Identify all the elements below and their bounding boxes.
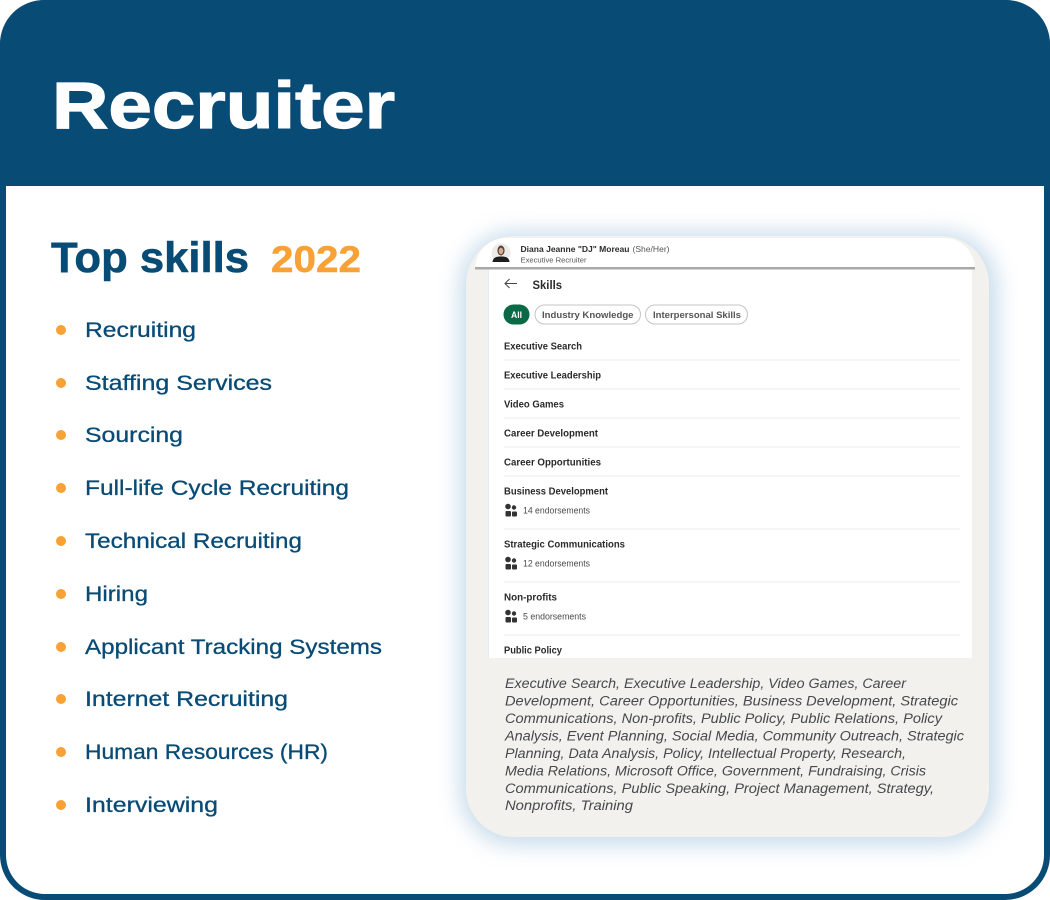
filter pills [504, 304, 748, 324]
endorsements: 5 endorsements [523, 612, 587, 622]
full skills paragraph: Executive Search, Executive Leadership, Video Games, Career [505, 676, 907, 691]
skills list [56, 319, 382, 817]
icon: people [505, 504, 517, 516]
avatar [492, 244, 510, 262]
full skills paragraph: Analysis, Event Planning, Social Media, Community Outreach, Strategic [504, 728, 964, 744]
skills heading: Skills [532, 280, 562, 292]
skills list: Internet Recruiting [85, 688, 288, 711]
panel shadow [460, 232, 997, 845]
profile bar: Diana Jeanne "DJ" Moreau [520, 244, 630, 254]
screenshot [475, 238, 975, 658]
skills list: Sourcing [85, 424, 183, 447]
heading: top skills 2022: 2022 [271, 239, 361, 280]
icon: people [505, 610, 517, 622]
full skills paragraph: Development, Career Opportunities, Business Development, Strategic [505, 694, 958, 708]
full skills paragraph: Nonprofits, Training [505, 798, 634, 813]
full skills paragraph: Planning, Data Analysis, Policy, Intellectual Property, Research, [505, 746, 906, 761]
skills list: Interviewing [85, 794, 218, 817]
profile bar: (She/Her) [632, 244, 670, 254]
profile bar: Executive Recruiter [520, 256, 587, 264]
skill rows [504, 342, 960, 656]
skills list: Recruiting [85, 319, 196, 342]
panel: linkedin skills [466, 236, 989, 837]
skill rows: Business Development [504, 486, 609, 498]
endorsements [505, 504, 591, 622]
skills list: Staffing Services [85, 372, 272, 395]
skill rows: Executive Leadership [504, 370, 601, 382]
heading: top skills 2022 [51, 234, 361, 282]
full skills paragraph: Communications, Public Speaking, Project Management, Strategy, [505, 781, 934, 796]
filter pills: Industry Knowledge [542, 310, 634, 320]
full skills paragraph: Media Relations, Microsoft Office, Government, Fundraising, Crisis [505, 764, 926, 778]
skills list: Hiring [85, 583, 148, 606]
skill rows: Career Opportunities [504, 458, 602, 468]
filter pills: Interpersonal Skills [653, 310, 741, 320]
header band [0, 0, 1050, 186]
skill rows: Non-profits [504, 592, 558, 604]
endorsements: 14 endorsements [523, 506, 591, 516]
full skills paragraph: Communications, Non-profits, Public Policy, Public Relations, Policy [505, 711, 943, 726]
endorsements: 12 endorsements [523, 558, 591, 568]
heading: top skills 2022: Top skills [51, 234, 249, 282]
skill rows: Strategic Communications [504, 540, 626, 550]
icon: people [505, 557, 517, 570]
skills list: Human Resources (HR) [85, 741, 328, 764]
skills list: Applicant Tracking Systems [85, 636, 382, 659]
skill rows: Video Games [504, 400, 565, 410]
skill rows: Career Development [504, 428, 599, 440]
title: Recruiter [52, 68, 395, 142]
skill rows: Executive Search [504, 342, 582, 352]
skills list: Technical Recruiting [85, 530, 302, 553]
full skills paragraph [504, 676, 964, 813]
skill rows: Public Policy [504, 646, 563, 656]
skills list: Full-life Cycle Recruiting [85, 477, 349, 500]
filter pills: All [511, 310, 522, 320]
back arrow [505, 279, 517, 288]
profile bar [475, 238, 975, 270]
